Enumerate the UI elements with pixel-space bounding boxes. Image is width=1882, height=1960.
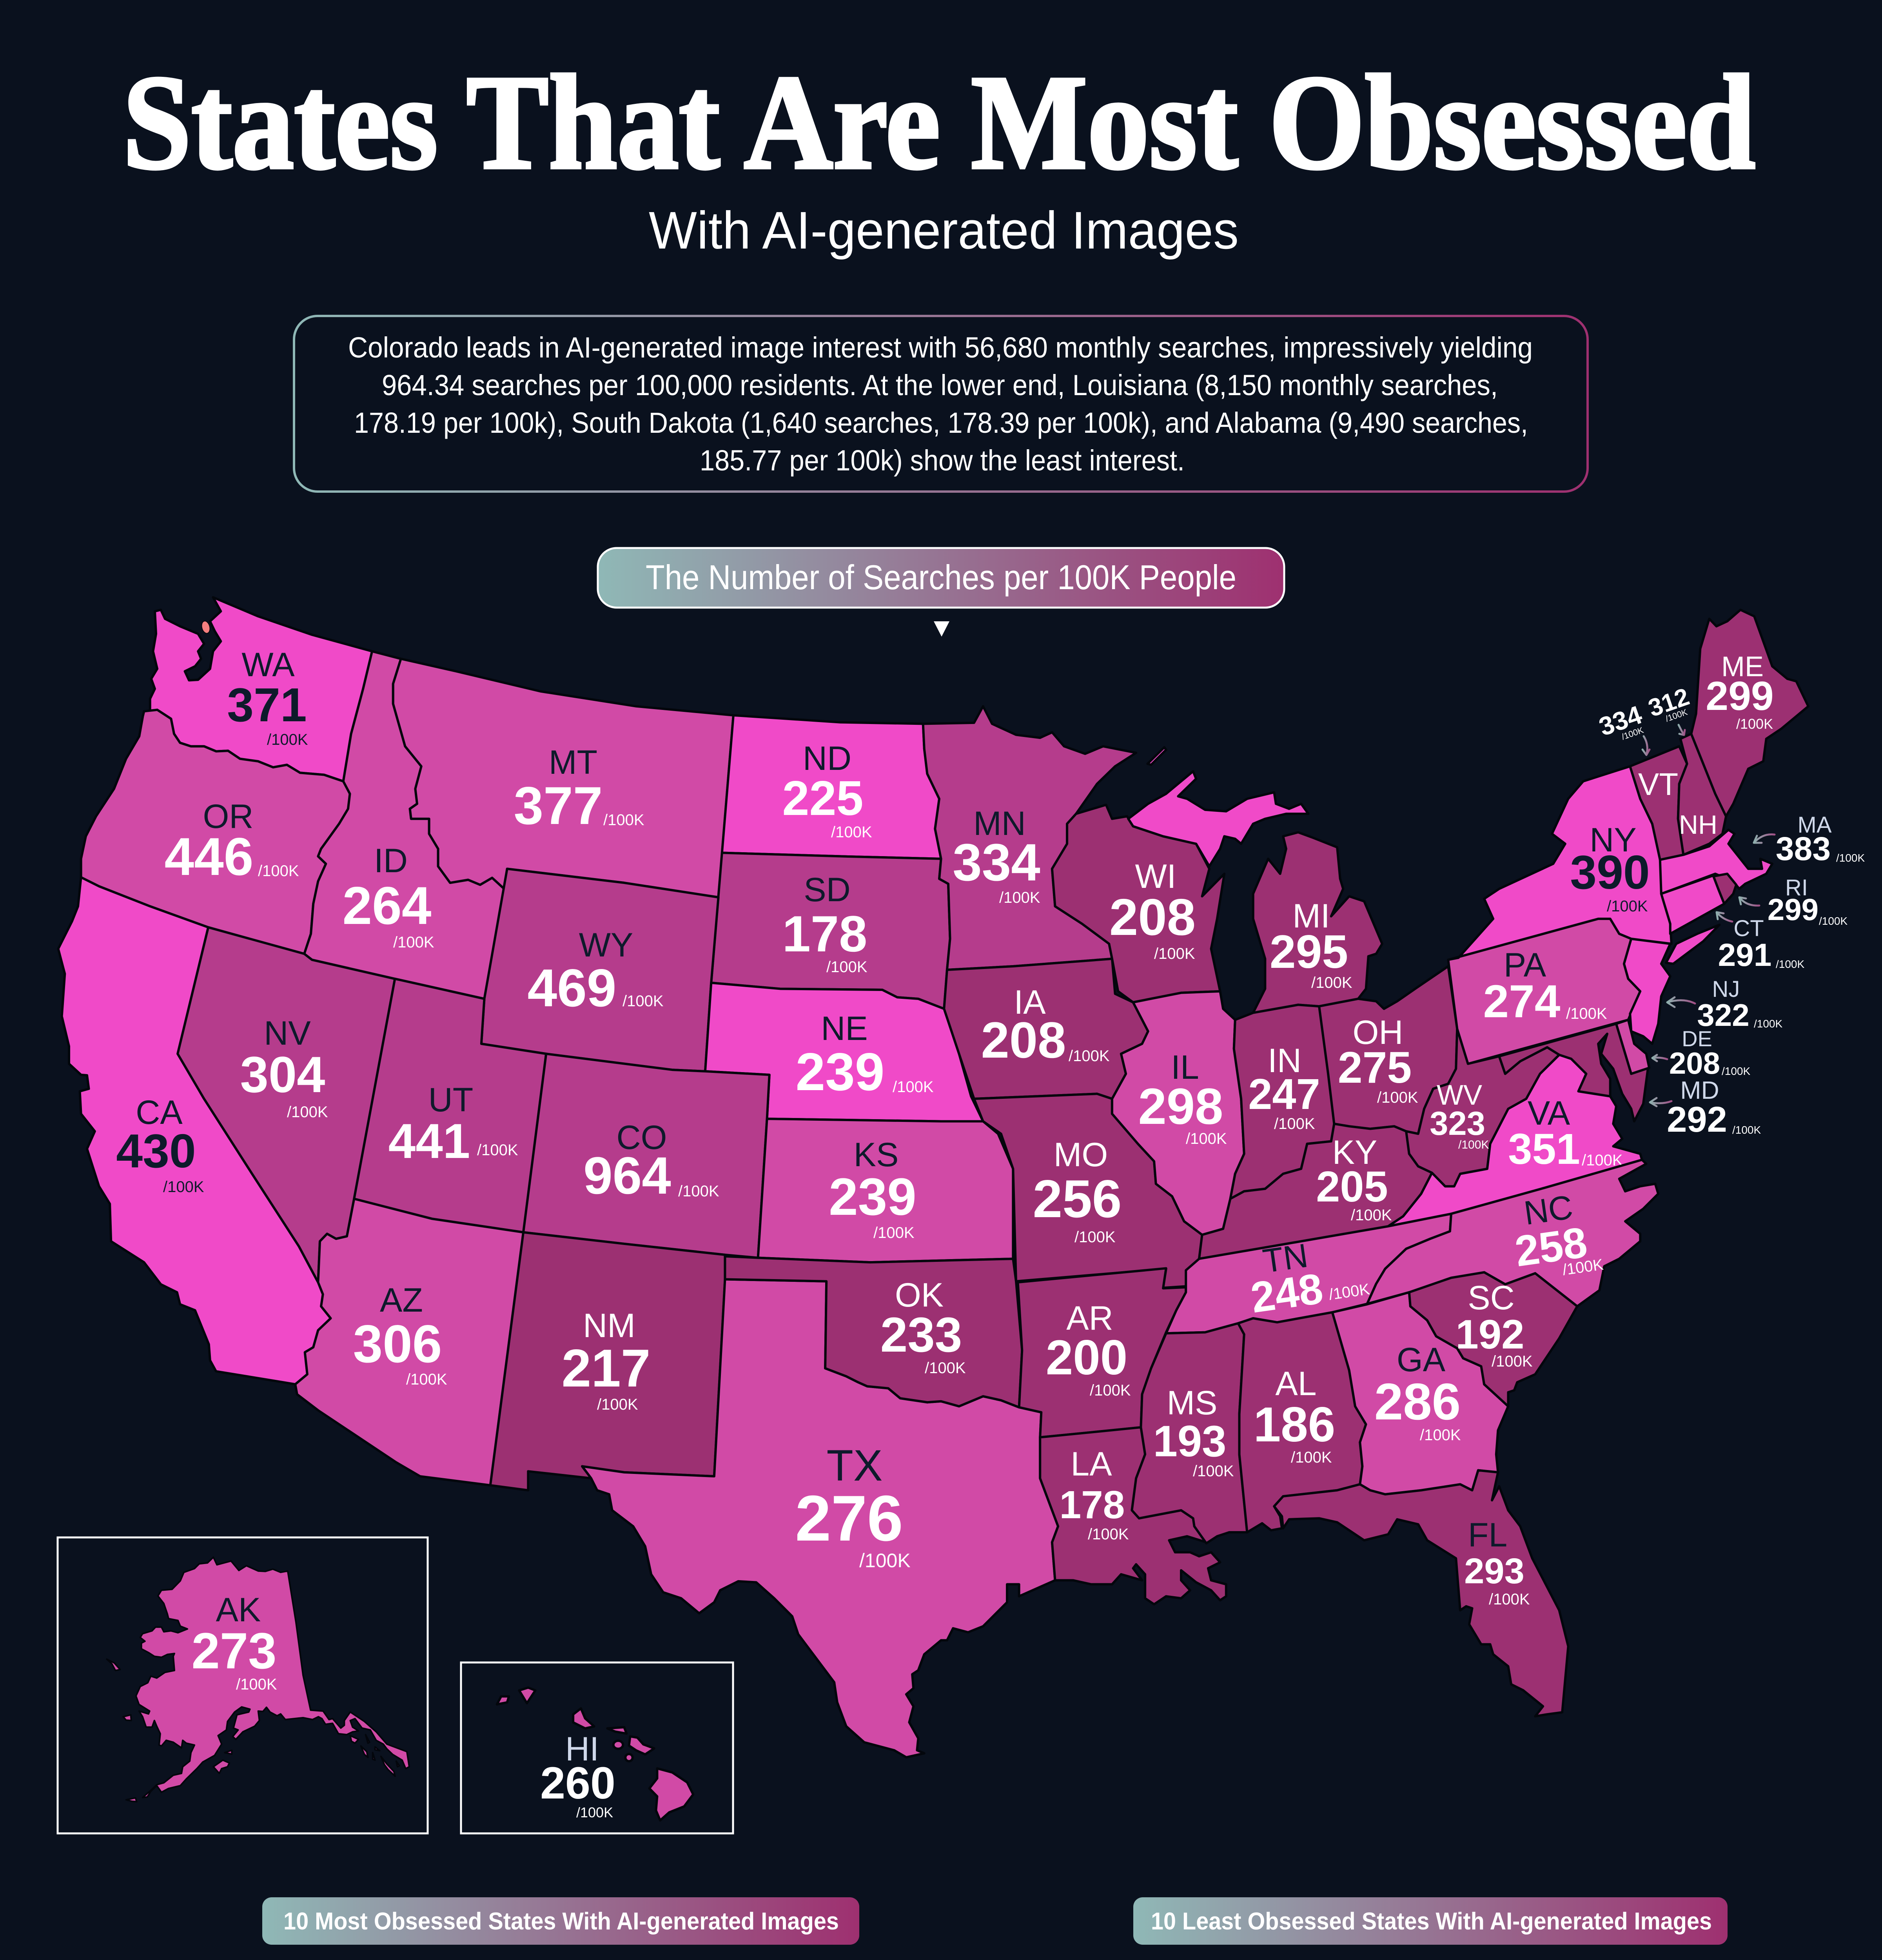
state: Arizona: AZ bbox=[380, 1281, 423, 1319]
VT value: 334 bbox=[1595, 700, 1646, 741]
state: South Dakota: SD bbox=[804, 871, 851, 909]
title: States That Are Most Obsessed bbox=[123, 47, 1755, 197]
state: Illinois: /100K bbox=[1186, 1130, 1227, 1147]
state: Michigan upper peninsula: MI bbox=[1292, 897, 1330, 935]
state: Montana: 377 bbox=[514, 776, 603, 835]
state: Utah: UT bbox=[428, 1081, 473, 1119]
inset: Alaska: /100K bbox=[236, 1676, 277, 1693]
state: Iowa: 208 bbox=[981, 1011, 1066, 1069]
state: Ohio: OH bbox=[1352, 1014, 1403, 1051]
inset: Hawaii: HI bbox=[565, 1730, 599, 1768]
state: Florida: 293 bbox=[1464, 1551, 1524, 1591]
subtitle: With AI-generated Images bbox=[649, 201, 1239, 260]
state: Florida: /100K bbox=[1489, 1591, 1530, 1608]
state: Missouri: /100K bbox=[1074, 1229, 1116, 1246]
state: Arizona bbox=[295, 1199, 523, 1485]
state: Pennsylvania: PA bbox=[1504, 946, 1546, 984]
state: Louisiana: LA bbox=[1071, 1445, 1112, 1483]
intro text box: 185.77 per 100k) show the least interest. bbox=[700, 444, 1185, 477]
state: Missouri: MO bbox=[1054, 1136, 1108, 1174]
chart: 10 most obsessed states bbox=[55, 1897, 950, 1960]
state: Utah: 441 bbox=[388, 1114, 470, 1169]
state: Louisiana: 178 bbox=[1060, 1483, 1125, 1527]
state: Maryland bbox=[1499, 1024, 1761, 1140]
state: Virginia: /100K bbox=[1582, 1152, 1623, 1169]
state: Indiana: 247 bbox=[1248, 1070, 1320, 1118]
state: Kansas: KS bbox=[854, 1136, 898, 1174]
state: New Mexico: 217 bbox=[562, 1338, 650, 1398]
state: South Dakota bbox=[711, 853, 950, 1009]
state: South Carolina: SC bbox=[1468, 1279, 1515, 1317]
state: Oregon bbox=[81, 710, 350, 954]
state: Pennsylvania bbox=[1448, 919, 1640, 1064]
state: Montana: MT bbox=[549, 744, 597, 781]
state: Vermont: VT bbox=[1638, 767, 1678, 802]
state: Pennsylvania: 274 bbox=[1483, 976, 1560, 1027]
state: Florida: FL bbox=[1468, 1516, 1507, 1554]
state: Iowa bbox=[944, 959, 1148, 1099]
state: North Carolina: 258 bbox=[1512, 1218, 1590, 1276]
intro text box: 178.19 per 100k), South Dakota (1,640 searches, 178.39 per 100k), and Alabama (9,490 searches, bbox=[354, 407, 1528, 439]
state: Texas: TX bbox=[826, 1441, 883, 1490]
state: Michigan lower peninsula bbox=[1253, 832, 1382, 1013]
map of the United States bbox=[58, 597, 1865, 1757]
NH value: /100K bbox=[1664, 707, 1689, 724]
state: Texas: /100K bbox=[859, 1550, 911, 1572]
state: Arizona: 306 bbox=[353, 1314, 442, 1374]
state: Oklahoma: /100K bbox=[925, 1359, 966, 1377]
state: West Virginia: 323 bbox=[1430, 1105, 1485, 1142]
state: New York bbox=[1448, 766, 1719, 964]
state: Kansas bbox=[758, 1119, 1013, 1262]
state: Arizona: /100K bbox=[406, 1371, 447, 1388]
state: New Jersey: /100K bbox=[1754, 1018, 1782, 1030]
state: Missouri: 256 bbox=[1033, 1169, 1122, 1229]
state: California: 430 bbox=[116, 1124, 196, 1178]
state: California: CA bbox=[136, 1094, 183, 1131]
state: Ohio: 275 bbox=[1338, 1043, 1412, 1092]
state: North Carolina bbox=[1367, 1160, 1658, 1306]
state: Michigan upper peninsula: /100K bbox=[1311, 974, 1352, 991]
state: New Mexico bbox=[490, 1232, 725, 1490]
state: Indiana bbox=[1230, 1005, 1334, 1199]
state: Virginia bbox=[1388, 1055, 1642, 1226]
state: Arkansas: 200 bbox=[1046, 1330, 1127, 1385]
state: Nebraska bbox=[705, 983, 983, 1121]
VT value: /100K bbox=[1620, 725, 1645, 742]
intro text box: 964.34 searches per 100,000 residents. At the lower end, Louisiana (8,150 monthly searches, bbox=[382, 369, 1498, 401]
state: Massachusetts bbox=[1660, 812, 1865, 894]
NH value: 312 bbox=[1645, 683, 1693, 722]
state: Kansas: /100K bbox=[873, 1224, 915, 1241]
state: Wisconsin: /100K bbox=[1154, 945, 1195, 962]
state: Colorado: 964 bbox=[583, 1147, 671, 1205]
state: South Carolina: 192 bbox=[1456, 1312, 1524, 1357]
intro text box: Colorado leads in AI-generated image interest with 56,680 monthly searches, impressively yielding bbox=[348, 331, 1533, 364]
state: Delaware: 208 bbox=[1669, 1046, 1720, 1080]
state: Rhode Island: /100K bbox=[1819, 915, 1848, 927]
state: Colorado: /100K bbox=[678, 1183, 719, 1200]
chart heading pill bbox=[262, 1897, 859, 1945]
state: Pennsylvania: /100K bbox=[1566, 1005, 1607, 1022]
state: Wisconsin: WI bbox=[1135, 858, 1176, 895]
state: West Virginia bbox=[1406, 1029, 1559, 1186]
state: South Carolina bbox=[1409, 1272, 1577, 1406]
state: Delaware: /100K bbox=[1722, 1065, 1750, 1077]
inset: Alaska: AK bbox=[216, 1591, 261, 1629]
state: Mississippi: 193 bbox=[1153, 1417, 1226, 1466]
state: Maryland: MD bbox=[1680, 1076, 1719, 1104]
state: Virginia: VA bbox=[1528, 1094, 1570, 1132]
state: North Dakota: ND bbox=[803, 740, 851, 777]
state: Florida bbox=[1274, 1470, 1568, 1716]
state: Georgia: 286 bbox=[1374, 1373, 1461, 1430]
state: Nebraska: 239 bbox=[796, 1042, 884, 1102]
intro text box bbox=[294, 316, 1588, 492]
state: Minnesota bbox=[923, 706, 1136, 970]
inset: Alaska bbox=[58, 1537, 428, 1833]
state: Connecticut bbox=[1661, 875, 1804, 973]
state: Illinois bbox=[1112, 991, 1244, 1235]
state: Michigan upper peninsula bbox=[1128, 747, 1382, 1013]
state: Wisconsin bbox=[1052, 805, 1224, 1002]
state: Colorado bbox=[523, 1054, 769, 1258]
state: Virginia: 351 bbox=[1508, 1125, 1580, 1173]
state: Utah bbox=[354, 979, 546, 1232]
chart: 10 least obsessed states bbox=[967, 1897, 1839, 1960]
state: California bbox=[58, 877, 331, 1384]
state: Arkansas: /100K bbox=[1090, 1382, 1131, 1399]
state: North Dakota: 225 bbox=[782, 771, 863, 826]
state: Alabama: /100K bbox=[1291, 1449, 1332, 1466]
state: Oklahoma bbox=[725, 1256, 1022, 1407]
state: New Jersey: 322 bbox=[1697, 998, 1750, 1033]
state: Tennessee: 248 bbox=[1248, 1264, 1326, 1322]
state: Louisiana: /100K bbox=[1088, 1526, 1129, 1543]
state: Vermont bbox=[1595, 700, 1687, 860]
state: Massachusetts: 383 bbox=[1776, 830, 1831, 867]
pointer triangle bbox=[934, 621, 949, 637]
inset: Alaska: 273 bbox=[192, 1622, 276, 1679]
state: Tennessee: /100K bbox=[1328, 1281, 1371, 1303]
state: Nevada: 304 bbox=[240, 1046, 325, 1103]
state: Indiana: IN bbox=[1268, 1042, 1301, 1080]
state: Alabama: 186 bbox=[1254, 1397, 1335, 1452]
state: Michigan upper peninsula: 295 bbox=[1270, 926, 1348, 978]
inset: Hawaii bbox=[461, 1662, 733, 1833]
state: Ohio bbox=[1319, 966, 1457, 1134]
state: Georgia bbox=[1332, 1292, 1508, 1494]
state: Utah: /100K bbox=[477, 1142, 518, 1159]
chart heading pill bbox=[1133, 1897, 1728, 1945]
state: West Virginia: /100K bbox=[1458, 1138, 1489, 1151]
state: Iowa: /100K bbox=[1069, 1047, 1110, 1065]
state: Minnesota: 334 bbox=[953, 833, 1040, 892]
state: Oklahoma: OK bbox=[895, 1276, 944, 1314]
state: Minnesota: /100K bbox=[999, 889, 1040, 906]
state: North Dakota: /100K bbox=[831, 824, 872, 841]
state: Idaho: 264 bbox=[343, 876, 431, 935]
state: Minnesota: MN bbox=[973, 805, 1026, 842]
state: Alabama bbox=[1238, 1312, 1366, 1532]
state: Mississippi: /100K bbox=[1193, 1463, 1234, 1480]
state: Mississippi: MS bbox=[1167, 1384, 1218, 1422]
VT value bbox=[1595, 700, 1650, 755]
state: Kansas: 239 bbox=[829, 1168, 916, 1226]
state: Montana: /100K bbox=[603, 811, 644, 829]
state: Maryland: /100K bbox=[1732, 1124, 1761, 1136]
state: Washington: /100K bbox=[267, 731, 308, 748]
state: Louisiana bbox=[1040, 1427, 1226, 1604]
state: Iowa: IA bbox=[1014, 984, 1046, 1021]
state: Maryland: 292 bbox=[1667, 1100, 1727, 1140]
state: Ohio: /100K bbox=[1377, 1089, 1418, 1106]
state: Illinois: 298 bbox=[1138, 1078, 1223, 1135]
state: Texas: 276 bbox=[795, 1482, 903, 1554]
state: Rhode Island bbox=[1713, 874, 1848, 927]
state: New York: NY bbox=[1590, 821, 1637, 859]
state: Nevada: NV bbox=[264, 1014, 311, 1052]
state: Montana bbox=[393, 659, 733, 897]
state: Mississippi bbox=[1132, 1323, 1247, 1543]
state: Wyoming: /100K bbox=[622, 993, 664, 1010]
state: Arkansas: AR bbox=[1066, 1299, 1113, 1337]
state: Wyoming bbox=[481, 869, 719, 1071]
state: South Dakota: 178 bbox=[782, 905, 867, 962]
state: Connecticut: /100K bbox=[1776, 958, 1804, 970]
state: Colorado: CO bbox=[616, 1119, 667, 1156]
state: Wyoming: 469 bbox=[528, 958, 616, 1018]
state: Rhode Island: RI bbox=[1785, 875, 1808, 900]
state: Washington: WA bbox=[241, 646, 295, 684]
state: Maine: ME bbox=[1721, 651, 1764, 682]
state: Rhode Island: 299 bbox=[1768, 892, 1818, 927]
state: California: /100K bbox=[163, 1178, 204, 1196]
state: Arkansas bbox=[1018, 1268, 1186, 1437]
chart heading pill: 10 Most Obsessed States With AI-generated Images bbox=[283, 1908, 839, 1935]
state: Delaware bbox=[1616, 1020, 1750, 1080]
state: North Dakota bbox=[722, 715, 941, 859]
state: Maine bbox=[1691, 610, 1808, 816]
map heading pill bbox=[598, 548, 1284, 608]
state: Nevada bbox=[178, 927, 395, 1282]
state: Idaho bbox=[304, 651, 504, 999]
state: Idaho: /100K bbox=[393, 934, 434, 951]
state: Delaware: DE bbox=[1682, 1026, 1712, 1051]
state: Oregon: OR bbox=[203, 798, 253, 835]
state: Maine: 299 bbox=[1706, 673, 1774, 719]
state: Nebraska: NE bbox=[821, 1010, 868, 1047]
state: Massachusetts: /100K bbox=[1836, 852, 1865, 864]
state: Texas bbox=[582, 1279, 1058, 1757]
state: Tennessee: TN bbox=[1261, 1237, 1310, 1280]
state: Connecticut: 291 bbox=[1718, 937, 1771, 973]
state: South Carolina: /100K bbox=[1492, 1353, 1533, 1370]
state: Wisconsin: 208 bbox=[1109, 888, 1196, 946]
state: New Mexico: /100K bbox=[597, 1396, 638, 1413]
state: New York: 390 bbox=[1570, 846, 1650, 899]
state: Washington bbox=[150, 597, 372, 781]
inset: Hawaii: 260 bbox=[540, 1758, 615, 1808]
state: South Dakota: /100K bbox=[826, 958, 867, 976]
state: New Hampshire: NH bbox=[1679, 810, 1717, 840]
state: Wyoming: WY bbox=[579, 926, 633, 964]
state: Maine: /100K bbox=[1736, 716, 1773, 732]
state: Nebraska: /100K bbox=[893, 1078, 934, 1096]
state: New Jersey: NJ bbox=[1712, 976, 1740, 1002]
state: New Mexico: NM bbox=[583, 1307, 635, 1345]
state: Alabama: AL bbox=[1275, 1365, 1317, 1403]
state: Missouri bbox=[974, 1094, 1202, 1288]
state: New Jersey bbox=[1624, 939, 1782, 1044]
state: Oregon: /100K bbox=[258, 862, 299, 880]
state: Kentucky: 205 bbox=[1316, 1163, 1388, 1211]
state: Georgia: /100K bbox=[1420, 1426, 1461, 1444]
state: Massachusetts: MA bbox=[1798, 812, 1832, 838]
state: Kentucky bbox=[1199, 1124, 1432, 1259]
state: Connecticut: CT bbox=[1733, 916, 1764, 941]
state: Oregon: 446 bbox=[165, 827, 253, 886]
state: West Virginia: WV bbox=[1437, 1080, 1482, 1111]
state: Washington: 371 bbox=[227, 678, 307, 731]
state: Kentucky: KY bbox=[1332, 1134, 1377, 1171]
state: Nevada: /100K bbox=[287, 1103, 328, 1121]
state: Georgia: GA bbox=[1397, 1341, 1446, 1379]
state: Idaho: ID bbox=[374, 842, 408, 880]
state: New Hampshire bbox=[1645, 683, 1726, 855]
inset: Hawaii: /100K bbox=[576, 1804, 613, 1820]
state: Oklahoma: 233 bbox=[880, 1308, 962, 1362]
state: Indiana: /100K bbox=[1274, 1115, 1315, 1132]
state: Tennessee bbox=[1166, 1214, 1451, 1333]
state: Illinois: IL bbox=[1171, 1049, 1199, 1086]
state: North Carolina: NC bbox=[1522, 1188, 1575, 1232]
state: North Carolina: /100K bbox=[1561, 1256, 1604, 1279]
state: New York: /100K bbox=[1607, 898, 1648, 915]
chart heading pill: 10 Least Obsessed States With AI-generated Images bbox=[1151, 1908, 1712, 1935]
map heading pill: The Number of Searches per 100K People bbox=[646, 558, 1236, 597]
state: Kentucky: /100K bbox=[1351, 1207, 1392, 1224]
